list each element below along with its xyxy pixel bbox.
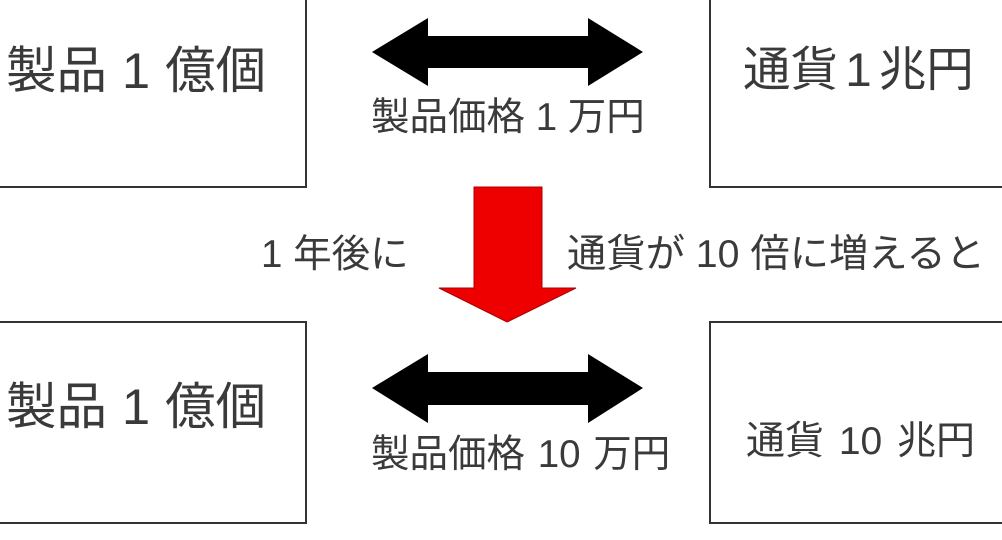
text: top right currency: 通貨 1 兆円 [743, 44, 974, 97]
panel: top right currency box [709, 0, 1002, 188]
icon: top double arrow [372, 18, 643, 86]
text: top left products: 製品 1 億個 [6, 42, 266, 99]
text: bottom price label: 製品価格 10 万円 [371, 433, 670, 476]
text: bottom left products: 製品 1 億個 [6, 378, 266, 435]
panel: bottom right currency box [709, 321, 1002, 524]
text: one year later: 1 年後に [261, 233, 409, 276]
text: bottom right currency: 通貨 10 兆円 [746, 420, 975, 463]
icon: red down arrow [438, 186, 576, 322]
icon: bottom double arrow [372, 354, 643, 423]
panel: bottom left products box [0, 321, 307, 524]
text: currency increases tenfold: 通貨が 10 倍に増えると [567, 232, 985, 276]
panel: top left products box [0, 0, 307, 188]
text: top price label: 製品価格 1 万円 [371, 96, 645, 139]
